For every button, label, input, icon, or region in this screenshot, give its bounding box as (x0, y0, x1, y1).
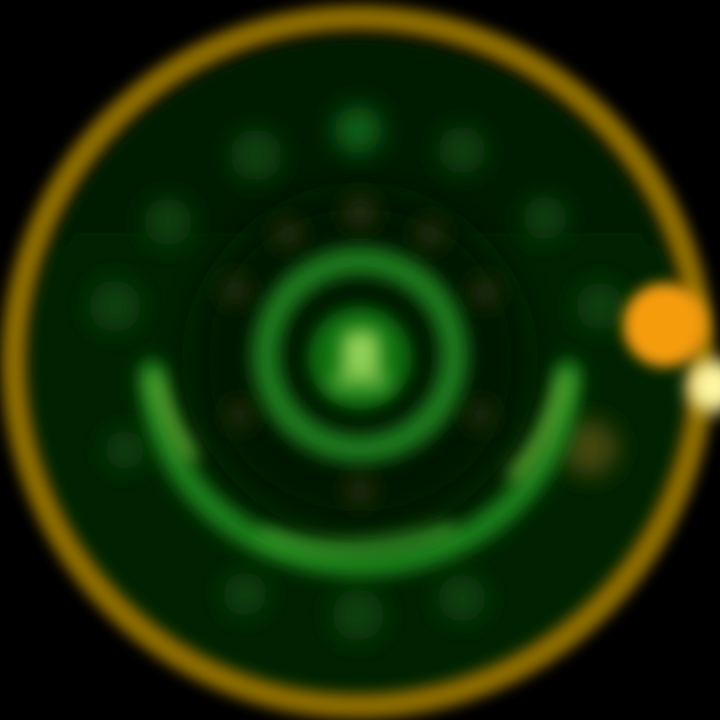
dim outer markers (89, 106, 624, 641)
orange sun (623, 283, 707, 367)
bright highlight (688, 360, 720, 412)
brownish marker (562, 420, 618, 476)
bottom progress arc (152, 372, 568, 564)
center icon (330, 330, 390, 391)
inner dark disc (195, 195, 525, 525)
central rings (266, 261, 454, 449)
dim inner markers (221, 196, 499, 504)
